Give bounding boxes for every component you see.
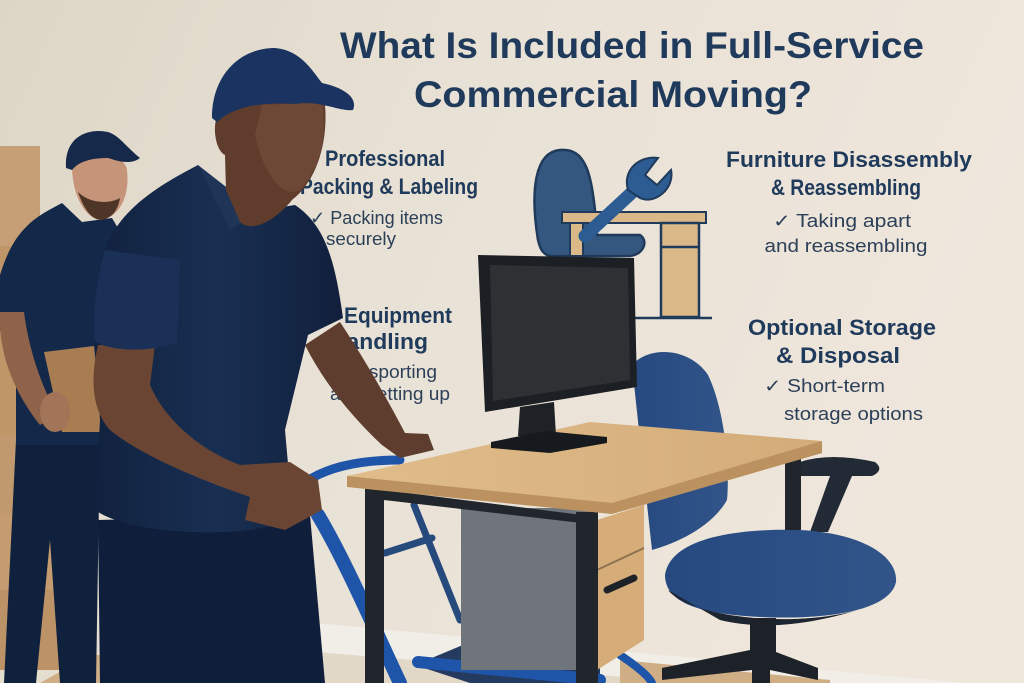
- back worker cap: [66, 131, 140, 170]
- section: furniture disassembly: Furniture Disassembly: [726, 147, 973, 172]
- stacked cardboard boxes: [0, 146, 76, 670]
- legs: [98, 515, 325, 683]
- desk legs: [365, 456, 801, 683]
- desk drawers: [461, 508, 597, 670]
- front worker: [94, 48, 434, 683]
- chair armrest: [800, 457, 879, 532]
- carried box: [44, 346, 103, 432]
- near arm: [94, 345, 322, 530]
- office chair: [632, 352, 896, 683]
- section: optional storage and disposal: [748, 315, 936, 424]
- section: equipment handling: Equipment: [344, 303, 453, 328]
- back worker hand: [40, 392, 70, 432]
- section: furniture disassembly: and reassembling: [764, 236, 928, 256]
- chair back: [632, 352, 728, 550]
- section: professional packing and labeling: securely: [326, 229, 396, 249]
- sleeve: [94, 250, 180, 350]
- desk: [347, 422, 822, 683]
- head and neck: [215, 94, 326, 226]
- back worker legs: [4, 440, 100, 683]
- shirt: [95, 165, 343, 532]
- dolly hand truck: [312, 460, 652, 683]
- face highlight: [255, 102, 324, 192]
- icon: chair, desk and wrench: [534, 150, 712, 318]
- section: equipment handling: Handling: [330, 329, 428, 354]
- cap: [212, 48, 354, 122]
- main title: What Is Included in Full-Service: [340, 25, 924, 66]
- section: optional storage and disposal: & Disposal: [776, 343, 900, 368]
- section: professional packing and labeling: [300, 146, 478, 249]
- main title: Commercial Moving?: [414, 74, 812, 115]
- section: professional packing and labeling: Packing & Labeling: [300, 174, 478, 199]
- back worker shirt: [0, 203, 125, 445]
- back worker: [0, 131, 140, 683]
- section: professional packing and labeling: Professional: [325, 146, 445, 171]
- section: furniture disassembly: ✓ Taking apart: [773, 211, 911, 231]
- back worker head: [72, 154, 128, 220]
- section: equipment handling: [330, 303, 453, 404]
- section: optional storage and disposal: storage options: [784, 404, 923, 424]
- far arm: [305, 322, 434, 458]
- chair seat: [665, 530, 896, 618]
- chair base: [662, 618, 818, 683]
- desktop: [347, 422, 822, 514]
- section: equipment handling: Transporting: [330, 362, 437, 382]
- main title: [340, 25, 924, 115]
- computer monitor: [478, 255, 637, 453]
- section: furniture disassembly: & Reassembling: [771, 175, 921, 200]
- floor and baseboard: [40, 623, 965, 683]
- back worker arm: [0, 312, 58, 425]
- section: professional packing and labeling: ✓ Packing items: [310, 208, 443, 228]
- section: optional storage and disposal: ✓ Short-term: [764, 376, 885, 396]
- section: furniture disassembly: [726, 147, 973, 256]
- section: equipment handling: and setting up: [330, 384, 450, 404]
- section: optional storage and disposal: Optional Storage: [748, 315, 936, 340]
